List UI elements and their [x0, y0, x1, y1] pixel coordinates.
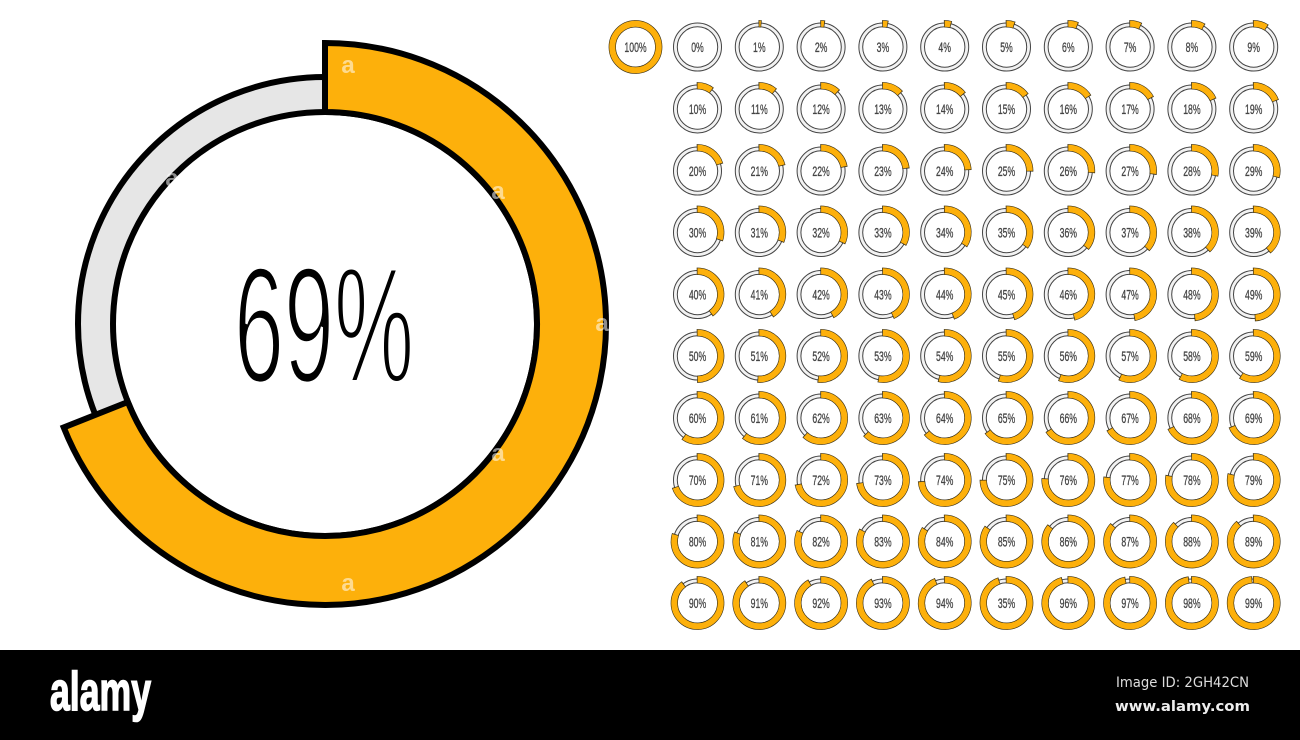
gauge 0%	[674, 23, 722, 71]
gauge 27%: 27%	[1121, 164, 1139, 180]
gauge 99%	[1230, 579, 1278, 627]
gauge 21%: 21%	[751, 164, 768, 180]
gauge 14%: 14%	[936, 102, 953, 118]
gauge 36%: 36%	[1060, 225, 1077, 241]
gauge 64%	[921, 394, 969, 442]
gauge 11%: 11%	[751, 102, 768, 118]
gauge 6%	[1044, 23, 1092, 71]
gauge 18%: 18%	[1183, 102, 1201, 118]
gauge 22%	[797, 147, 845, 195]
gauge 44%	[921, 270, 969, 318]
alamy logo: alamy	[50, 660, 151, 722]
gauge 24%	[921, 147, 969, 195]
gauge 99%: 99%	[1245, 596, 1262, 612]
gauge 10%: 10%	[689, 102, 706, 118]
gauge 73%	[859, 456, 907, 504]
gauge 45%	[982, 270, 1030, 318]
gauge 45%: 45%	[998, 287, 1015, 303]
gauge 73%: 73%	[874, 473, 892, 489]
gauge 61%: 61%	[751, 411, 768, 427]
gauge 16%: 16%	[1060, 102, 1077, 118]
gauge 89%: 89%	[1245, 534, 1262, 550]
gauge 88%: 88%	[1183, 534, 1201, 550]
gauge 62%	[797, 394, 845, 442]
main gauge: 69%	[64, 43, 609, 605]
gauge 34%	[921, 208, 969, 256]
main gauge track	[78, 77, 572, 571]
gauge 42%	[797, 270, 845, 318]
gauge 68%	[1168, 394, 1216, 442]
gauge 25%	[982, 147, 1030, 195]
gauge 30%	[674, 208, 722, 256]
gauge 77%: 77%	[1121, 473, 1139, 489]
gauge 26%: 26%	[1060, 164, 1077, 180]
gauge 77%	[1106, 456, 1154, 504]
gauge 48%	[1168, 270, 1216, 318]
gauge 13%: 13%	[874, 102, 892, 118]
gauge 62%: 62%	[812, 411, 830, 427]
watermark marks: a	[341, 570, 355, 597]
gauge 44%: 44%	[936, 287, 953, 303]
gauge 33%	[859, 208, 907, 256]
gauge 23%	[859, 147, 907, 195]
gauge 91%: 91%	[751, 596, 768, 612]
gauge 71%	[735, 456, 783, 504]
gauge 54%: 54%	[936, 349, 953, 365]
gauge 100%	[612, 23, 660, 71]
gauge 37%	[1106, 208, 1154, 256]
gauge 98%: 98%	[1183, 596, 1201, 612]
gauge 12%: 12%	[812, 102, 830, 118]
gauge 2%	[797, 23, 845, 71]
gauge 9%	[1230, 23, 1278, 71]
gauge 28%	[1168, 147, 1216, 195]
gauge 70%: 70%	[689, 473, 706, 489]
gauge 11%	[735, 85, 783, 133]
gauge 93%	[859, 579, 907, 627]
gauge 84%: 84%	[936, 534, 953, 550]
gauge 54%	[921, 332, 969, 380]
watermark marks: a	[491, 440, 505, 467]
gauge 46%	[1044, 270, 1092, 318]
gauge 12%	[797, 85, 845, 133]
gauge 20%	[674, 147, 722, 195]
gauge 8%: 8%	[1186, 40, 1198, 56]
gauge 82%	[797, 518, 845, 566]
gauge 75%	[982, 456, 1030, 504]
gauge 52%	[797, 332, 845, 380]
gauge 84%	[921, 518, 969, 566]
gauge 79%	[1230, 456, 1278, 504]
gauge 72%: 72%	[812, 473, 830, 489]
gauge 39%: 39%	[1245, 225, 1262, 241]
gauge 3%: 3%	[877, 40, 889, 56]
gauge 66%	[1044, 394, 1092, 442]
gauge 89%	[1230, 518, 1278, 566]
gauge 95% (labelled 35% in the reference): 35%	[998, 596, 1015, 612]
gauge 61%	[735, 394, 783, 442]
gauge 9%: 9%	[1247, 40, 1260, 56]
gauge 57%	[1106, 332, 1154, 380]
gauge 29%	[1230, 147, 1278, 195]
gauge 17%: 17%	[1121, 102, 1139, 118]
gauge 63%: 63%	[874, 411, 892, 427]
gauge 98%	[1168, 579, 1216, 627]
gauge 69%	[1230, 394, 1278, 442]
gauge 3%	[859, 23, 907, 71]
gauge 56%	[1044, 332, 1092, 380]
gauge 67%	[1106, 394, 1154, 442]
gauge 65%	[982, 394, 1030, 442]
gauge 58%	[1168, 332, 1216, 380]
gauge 58%: 58%	[1183, 349, 1201, 365]
gauge 76%	[1044, 456, 1092, 504]
watermark marks	[165, 52, 609, 597]
gauge 96%: 96%	[1060, 596, 1077, 612]
gauge 47%	[1106, 270, 1154, 318]
gauge 25%: 25%	[998, 164, 1015, 180]
gauge 21%	[735, 147, 783, 195]
gauge 83%: 83%	[874, 534, 892, 550]
watermark marks: a	[165, 165, 179, 192]
gauge 97%: 97%	[1121, 596, 1139, 612]
gauge 38%: 38%	[1183, 225, 1201, 241]
gauge 47%: 47%	[1121, 287, 1139, 303]
gauge 93%: 93%	[874, 596, 892, 612]
gauge 24%: 24%	[936, 164, 953, 180]
gauge 43%	[859, 270, 907, 318]
gauge 88%	[1168, 518, 1216, 566]
gauge 59%	[1230, 332, 1278, 380]
main gauge orange arc	[64, 43, 606, 605]
gauge 14%	[921, 85, 969, 133]
gauge 50%	[674, 332, 722, 380]
gauge 80%	[674, 518, 722, 566]
gauge 91%	[735, 579, 783, 627]
gauge 55%: 55%	[998, 349, 1015, 365]
gauge 86%	[1044, 518, 1092, 566]
gauge 7%	[1106, 23, 1154, 71]
gauge 37%: 37%	[1121, 225, 1139, 241]
gauge 76%: 76%	[1060, 473, 1077, 489]
gauge 59%: 59%	[1245, 349, 1262, 365]
gauge 41%: 41%	[751, 287, 768, 303]
gauge 31%	[735, 208, 783, 256]
gauge 15%	[982, 85, 1030, 133]
main gauge value: 69%	[234, 233, 414, 417]
gauge 63%	[859, 394, 907, 442]
gauge 94%: 94%	[936, 596, 953, 612]
gauge 40%	[674, 270, 722, 318]
gauge 80%: 80%	[689, 534, 706, 550]
gauge 82%: 82%	[812, 534, 830, 550]
watermark marks: a	[595, 310, 609, 337]
gauge 96%	[1044, 579, 1092, 627]
gauge 5%	[982, 23, 1030, 71]
website: www.alamy.com	[1115, 699, 1250, 715]
gauge 65%: 65%	[998, 411, 1015, 427]
gauge 97%	[1106, 579, 1154, 627]
gauge 90%	[674, 579, 722, 627]
footer bar	[0, 650, 1300, 740]
gauge 20%: 20%	[689, 164, 706, 180]
gauge 10%	[674, 85, 722, 133]
gauge 30%: 30%	[689, 225, 706, 241]
gauge 46%: 46%	[1060, 287, 1077, 303]
gauge 40%: 40%	[689, 287, 706, 303]
gauge 22%: 22%	[812, 164, 830, 180]
gauge 4%	[921, 23, 969, 71]
gauge 1%: 1%	[753, 40, 766, 56]
gauge 53%	[859, 332, 907, 380]
gauge 94%	[921, 579, 969, 627]
gauge 85%: 85%	[998, 534, 1015, 550]
gauge 35%	[982, 208, 1030, 256]
gauge 55%	[982, 332, 1030, 380]
gauge 71%: 71%	[751, 473, 768, 489]
gauge 49%	[1230, 270, 1278, 318]
gauge 81%: 81%	[751, 534, 768, 550]
gauge 36%	[1044, 208, 1092, 256]
gauge 31%: 31%	[751, 225, 768, 241]
gauge 42%: 42%	[812, 287, 830, 303]
watermark marks: a	[491, 178, 505, 205]
gauge 29%: 29%	[1245, 164, 1262, 180]
gauge 38%	[1168, 208, 1216, 256]
gauge 74%	[921, 456, 969, 504]
gauge 68%: 68%	[1183, 411, 1201, 427]
gauge 70%	[674, 456, 722, 504]
gauge 50%: 50%	[689, 349, 706, 365]
gauge 15%: 15%	[998, 102, 1015, 118]
gauge 60%: 60%	[689, 411, 706, 427]
gauge 49%: 49%	[1245, 287, 1262, 303]
gauge 75%: 75%	[998, 473, 1015, 489]
gauge 78%: 78%	[1183, 473, 1201, 489]
gauge 90%: 90%	[689, 596, 706, 612]
gauge 39%	[1230, 208, 1278, 256]
gauge 87%	[1106, 518, 1154, 566]
gauge 27%	[1106, 147, 1154, 195]
gauge 83%	[859, 518, 907, 566]
image id: Image ID: 2GH42CN	[1116, 675, 1249, 691]
gauge 19%	[1230, 85, 1278, 133]
main gauge centre	[113, 112, 537, 536]
gauge 57%: 57%	[1121, 349, 1139, 365]
gauge 23%: 23%	[874, 164, 892, 180]
gauge 51%	[735, 332, 783, 380]
gauge 64%: 64%	[936, 411, 953, 427]
gauge 2%: 2%	[815, 40, 827, 56]
gauge 43%: 43%	[874, 287, 892, 303]
gauge 41%	[735, 270, 783, 318]
gauge 72%	[797, 456, 845, 504]
gauge 6%: 6%	[1062, 40, 1075, 56]
gauge 0%: 0%	[691, 40, 704, 56]
gauge 92%	[797, 579, 845, 627]
gauge 53%: 53%	[874, 349, 892, 365]
gauge 8%	[1168, 23, 1216, 71]
watermark marks: a	[341, 52, 355, 79]
gauge 7%: 7%	[1124, 40, 1136, 56]
gauge 51%: 51%	[751, 349, 768, 365]
gauge 87%: 87%	[1121, 534, 1139, 550]
gauge 52%: 52%	[812, 349, 830, 365]
gauge 17%	[1106, 85, 1154, 133]
gauge 19%: 19%	[1245, 102, 1262, 118]
gauge 33%: 33%	[874, 225, 892, 241]
gauge 85%	[982, 518, 1030, 566]
gauge 1%	[735, 23, 783, 71]
gauge 32%	[797, 208, 845, 256]
gauge 95% (labelled 35% in the reference)	[982, 579, 1030, 627]
gauge 28%: 28%	[1183, 164, 1201, 180]
gauge 86%: 86%	[1060, 534, 1077, 550]
gauge 81%	[735, 518, 783, 566]
gauge 78%	[1168, 456, 1216, 504]
gauge 56%: 56%	[1060, 349, 1077, 365]
gauge 66%: 66%	[1060, 411, 1077, 427]
gauge 67%: 67%	[1121, 411, 1139, 427]
gauge 60%	[674, 394, 722, 442]
gauge 48%: 48%	[1183, 287, 1201, 303]
gauge grid: 0% to 100%	[612, 23, 1278, 627]
gauge 35%: 35%	[998, 225, 1015, 241]
gauge 100%: 100%	[624, 40, 647, 56]
gauge 18%	[1168, 85, 1216, 133]
gauge 16%	[1044, 85, 1092, 133]
gauge 92%: 92%	[812, 596, 830, 612]
gauge 69%: 69%	[1245, 411, 1262, 427]
gauge 13%	[859, 85, 907, 133]
gauge 26%	[1044, 147, 1092, 195]
gauge 5%: 5%	[1000, 40, 1013, 56]
gauge 34%: 34%	[936, 225, 953, 241]
gauge 79%: 79%	[1245, 473, 1262, 489]
gauge 4%: 4%	[938, 40, 951, 56]
gauge 32%: 32%	[812, 225, 830, 241]
gauge 74%: 74%	[936, 473, 953, 489]
